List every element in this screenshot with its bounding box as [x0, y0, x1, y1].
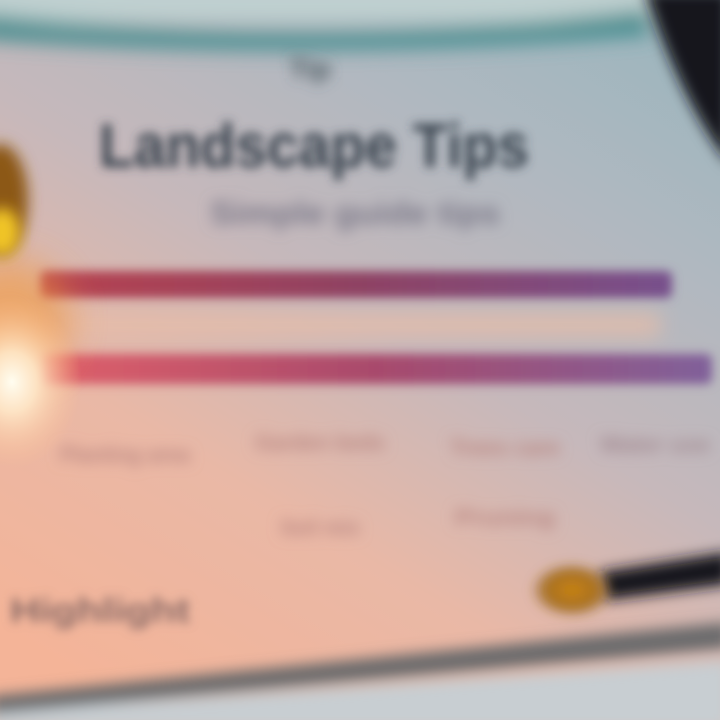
row 2 left: Soil mix	[280, 515, 361, 540]
left glow: orange and white flare	[0, 144, 82, 468]
bottom table edge	[0, 622, 720, 720]
white flare	[0, 296, 82, 468]
dark object top right	[645, 0, 720, 165]
top edge strip	[0, 0, 660, 49]
pen body	[600, 552, 720, 600]
column 1: Planting area	[60, 442, 191, 467]
bar 1	[40, 271, 672, 298]
body text columns	[60, 430, 710, 540]
column 2: Garden beds	[255, 430, 385, 455]
golden flame	[0, 144, 28, 256]
pen gold tip	[530, 562, 614, 618]
heading: Landscape Tips	[99, 112, 529, 181]
column 4: Water use	[600, 432, 710, 457]
warm haze	[0, 260, 70, 380]
subheading: Simple guide tips	[210, 195, 500, 231]
pen	[530, 552, 720, 618]
row 2 right: Pruning	[455, 505, 555, 530]
small top label: Tip	[289, 53, 331, 84]
column 3: Trees care	[450, 435, 560, 460]
text row between bars	[60, 314, 660, 336]
footer label: Highlight	[10, 592, 190, 630]
bar 2	[40, 354, 712, 384]
